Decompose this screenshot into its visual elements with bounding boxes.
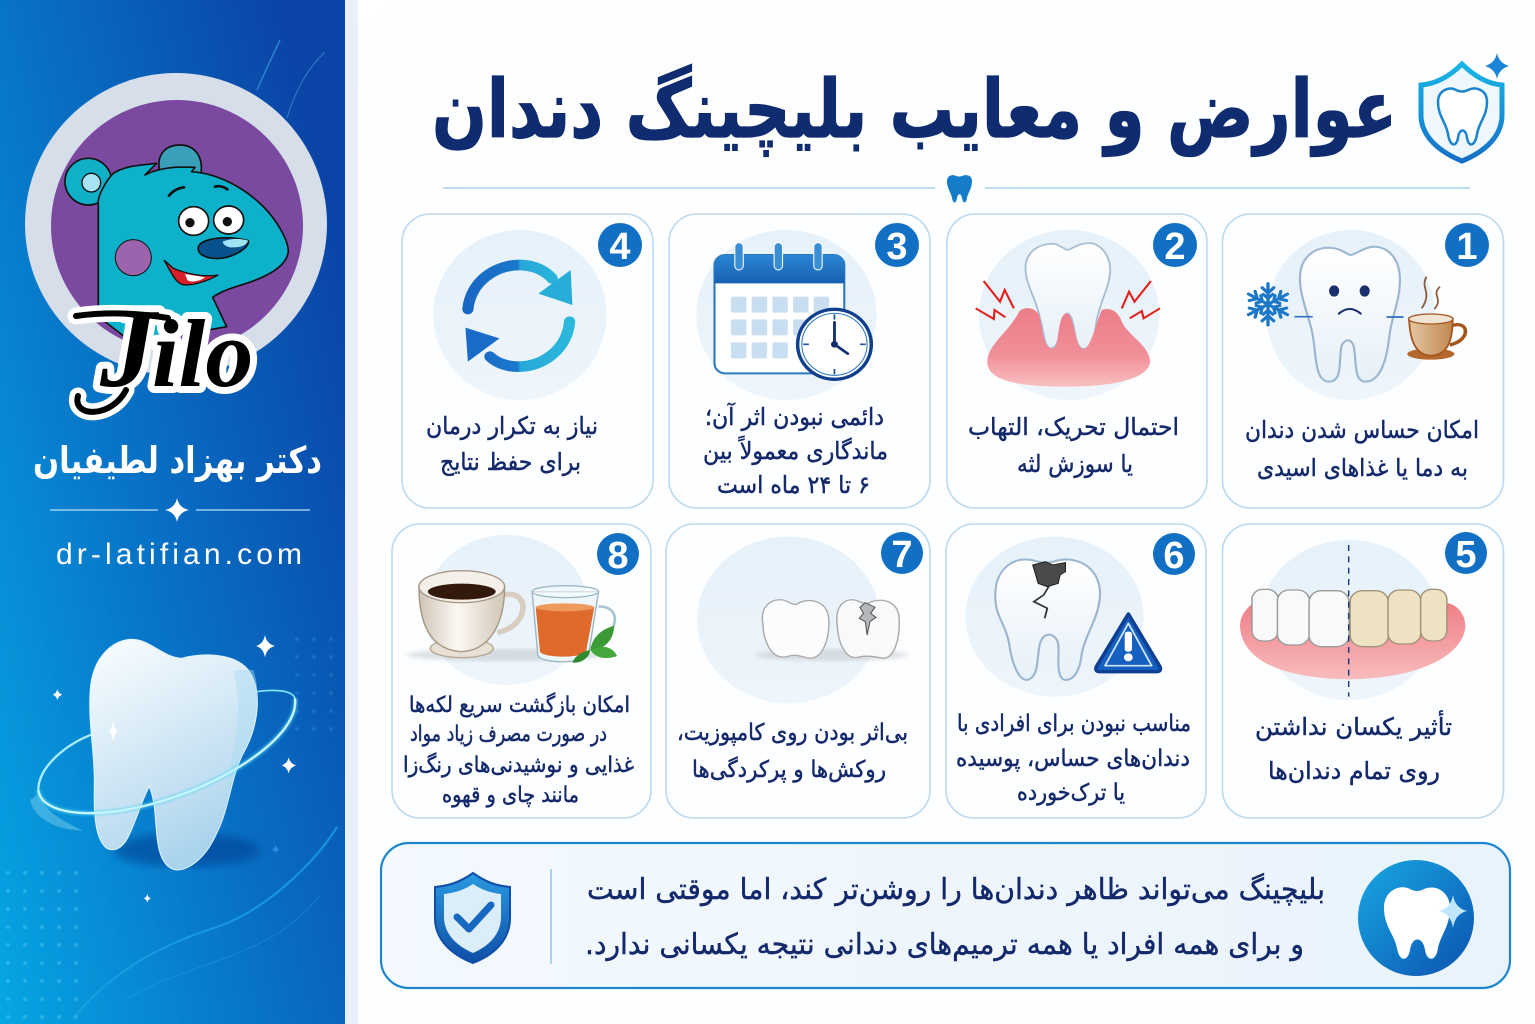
number badge 6 [1153,533,1195,577]
icon: decayed tooth with warning [965,537,1160,697]
card frame [666,524,930,818]
card 8 text [403,692,634,808]
card frame [392,524,651,818]
panel: card 8 stains return [392,524,651,818]
panel: card 4 repeat treatment [402,214,653,508]
card 8 text: غذایی و نوشیدنی‌های رنگ‌زا [403,752,634,778]
banner frame [381,843,1510,988]
banner text: بلیچینگ می‌تواند ظاهر دندان‌ها را روشن‌تر کند، اما موقتی است [587,872,1325,906]
panel: card 5 uneven effect [1222,524,1504,818]
number badge 2: 2 [1164,226,1186,268]
number badge 8: 8 [607,535,629,577]
number badge 7: 7 [891,534,913,576]
card 6 text [956,711,1191,806]
card 4 text: برای حفظ نتایج [440,448,581,476]
icon: sad tooth between cold and hot [1246,230,1465,400]
icon: circular repeat arrows [433,230,606,400]
card 5 text: روی تمام دندان‌ها [1268,757,1440,785]
card 8 text: در صورت مصرف زیاد مواد [410,722,607,747]
banner text [585,872,1325,962]
number badge 3 [875,223,919,268]
Jilo wordmark swash backing [76,313,168,412]
sidebar gradient background [0,0,345,1024]
number badge 7 [881,532,923,576]
card 6 text: مناسب نبودن برای افرادی با [957,711,1191,737]
card 3 text: ۶ تا ۲۴ ماه است [717,471,870,499]
card 3 text: ماندگاری معمولاً بین [703,435,888,465]
number badge 8 [597,533,639,577]
card frame [402,214,653,508]
icon: shield with check [435,873,510,963]
sidebar panel [0,0,358,1024]
card 5 text: تأثیر یکسان نداشتن [1255,710,1452,741]
card 4 text [426,412,598,476]
icon: calendar and clock [696,230,877,400]
card 8 text: امکان بازگشت سریع لکه‌ها [409,692,630,718]
card frame [669,214,930,508]
icon: white and yellow teeth comparison [1240,540,1465,700]
bear mascot [65,145,288,343]
card 2 text [968,413,1179,478]
panel: card 3 temporary effect [669,214,930,508]
callout banner [381,843,1510,988]
number badge 4 [598,223,642,268]
panel: card 2 gum irritation [947,214,1207,508]
panel: card 7 restorations [666,524,930,818]
icon: shield with tooth [1421,53,1509,161]
number badge 2 [1153,223,1197,268]
card 7 text: روکش‌ها و پرکردگی‌ها [692,756,886,783]
Jilo wordmark swash [76,313,168,412]
number badge 4: 4 [609,226,631,268]
panel: card 1 sensitivity [1222,214,1504,508]
card 1 text: امکان حساس شدن دندان [1245,416,1479,444]
title divider with tooth [443,175,1470,202]
card 1 text: به دما یا غذاهای اسیدی [1257,454,1468,482]
card 7 text: بی‌اثر بودن روی کامپوزیت، [677,720,908,746]
card 7 text [677,720,908,783]
logo ring [25,73,327,375]
Jilo logo [25,73,327,412]
number badge 5 [1445,532,1487,576]
number badge 5: 5 [1455,534,1477,576]
card 2 text: احتمال تحریک، التهاب [968,413,1179,441]
icon: coffee cup and tea glass [406,535,617,685]
number badge 6: 6 [1163,535,1185,577]
card 1 text [1245,416,1479,482]
card 6 text: دندان‌های حساس، پوسیده [956,746,1190,772]
card 3 text: دائمی نبودن اثر آن؛ [705,402,884,431]
number badge 3: 3 [886,226,908,268]
card 6 text: یا ترک‌خورده [1017,780,1125,806]
sidebar divider with star [50,498,310,522]
Jilo wordmark: Jilo [99,287,253,411]
card frame [946,524,1206,818]
doctor name: دکتر بهزاد لطیفیان [33,439,322,482]
icon: two restored teeth [697,537,908,703]
card 2 text: یا سوزش لثه [1017,450,1133,478]
card frame [947,214,1207,508]
number badge 1 [1445,223,1489,268]
illustration: glossy tooth with ring [30,635,296,903]
card 3 text [703,402,888,499]
card 4 text: نیاز به تکرار درمان [426,412,598,440]
panel: card 6 unsuitable cases [946,524,1206,818]
banner text: و برای همه افراد یا همه ترمیم‌های دندانی نتیجه یکسانی ندارد. [585,927,1304,962]
banner divider [550,869,552,964]
card 5 text [1255,710,1452,785]
icon: tooth in blue circle [1358,860,1474,976]
card frame [1222,214,1504,508]
card 8 text: مانند چای و قهوه [442,783,579,808]
logo purple disc [51,100,303,352]
icon: tooth with inflamed gum [976,230,1160,400]
website address: dr-latifian.com [56,538,302,571]
card frame [1222,524,1504,818]
number badge 1: 1 [1456,226,1478,268]
